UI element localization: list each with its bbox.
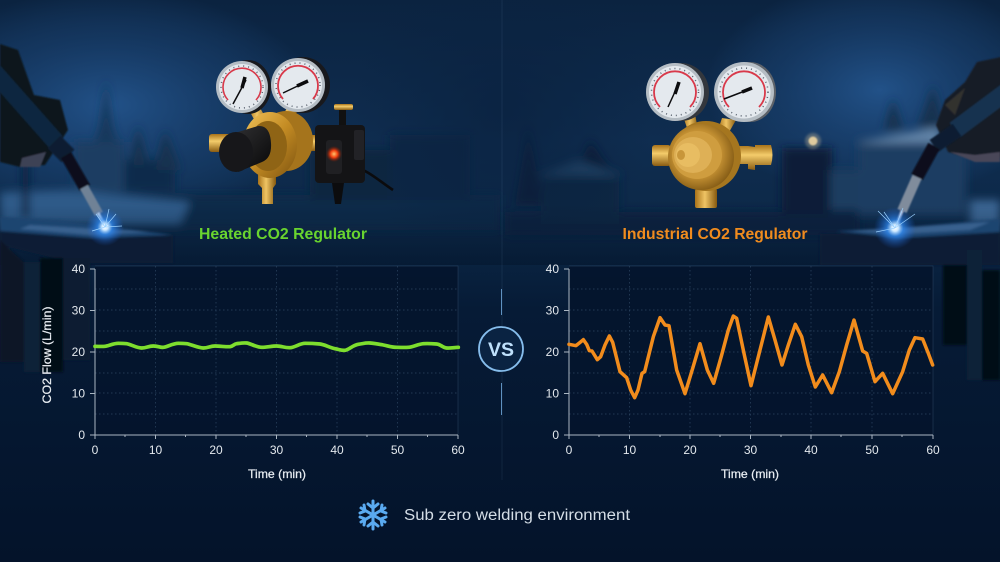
x axis title: Time (min) bbox=[248, 467, 306, 481]
green flow line bbox=[95, 343, 458, 350]
y tick labels: 10 bbox=[546, 386, 559, 400]
cable bbox=[352, 166, 393, 190]
y tick labels: 30 bbox=[72, 304, 85, 318]
center divider bbox=[500, 289, 502, 415]
brass body bbox=[243, 111, 313, 178]
y tick labels bbox=[546, 262, 559, 442]
background: left sky glow bbox=[0, 0, 320, 220]
x tick labels bbox=[566, 443, 940, 457]
bottom fitting bbox=[258, 172, 276, 204]
x tick labels: 10 bbox=[149, 443, 162, 457]
background: street lamp glow bbox=[805, 133, 821, 149]
left fitting bbox=[652, 145, 671, 166]
right gauge bbox=[271, 57, 330, 113]
steel table right bbox=[820, 219, 1000, 380]
y tick labels: 20 bbox=[72, 345, 85, 359]
background: right blurred town bbox=[505, 85, 1000, 235]
heater unit bbox=[315, 104, 365, 204]
heading: industrial regulator: Industrial CO2 Regulator bbox=[622, 226, 808, 243]
left gauge bbox=[646, 63, 709, 121]
orange flow line bbox=[569, 316, 933, 398]
y tick labels: 0 bbox=[78, 428, 85, 442]
x tick labels: 0 bbox=[92, 443, 99, 457]
x tick labels: 50 bbox=[391, 443, 404, 457]
x tick labels: 40 bbox=[330, 443, 344, 457]
vs badge: VS bbox=[488, 339, 514, 361]
plot background bbox=[569, 266, 933, 435]
icon: snowflake bbox=[360, 501, 386, 529]
grid bbox=[569, 266, 933, 435]
y tick labels bbox=[72, 262, 85, 442]
y tick labels: 20 bbox=[546, 345, 559, 359]
x tick labels: 50 bbox=[865, 443, 879, 457]
background: central darkening bbox=[353, 0, 653, 280]
gauge stems bbox=[248, 106, 297, 128]
caption text: Sub zero welding environment bbox=[404, 507, 631, 524]
y tick labels: 10 bbox=[72, 386, 85, 400]
heading: heated regulator: Heated CO2 Regulator bbox=[199, 226, 367, 243]
right welding scene bbox=[820, 55, 1000, 380]
weld spark right bbox=[874, 207, 975, 249]
x tick labels: 20 bbox=[683, 443, 697, 457]
plot background bbox=[95, 266, 458, 435]
x tick labels: 60 bbox=[926, 443, 940, 457]
axes bbox=[564, 269, 933, 439]
y tick labels: 0 bbox=[552, 428, 559, 442]
connector to heater bbox=[296, 135, 318, 151]
x tick labels: 30 bbox=[270, 443, 283, 457]
footer caption bbox=[360, 501, 631, 529]
x tick labels: 30 bbox=[744, 443, 757, 457]
background: right sky glow bbox=[705, 0, 1000, 200]
steel table left bbox=[0, 217, 173, 372]
x tick labels: 40 bbox=[804, 443, 818, 457]
gauge stems bbox=[683, 114, 736, 134]
heated regulator product bbox=[209, 57, 393, 204]
gloved hand right bbox=[936, 55, 1000, 162]
panel: industrial chart bbox=[546, 262, 940, 481]
x tick labels: 20 bbox=[209, 443, 223, 457]
panel: heated chart bbox=[40, 262, 465, 481]
y tick labels: 40 bbox=[546, 262, 559, 276]
gloved hand left bbox=[0, 44, 68, 167]
background: lower fade bbox=[0, 205, 1000, 265]
weld spark left bbox=[86, 208, 124, 246]
left gauge bbox=[216, 60, 271, 114]
background: faint centre seam bbox=[501, 0, 503, 480]
y axis title: CO2 Flow (L/min) bbox=[40, 306, 54, 404]
x tick labels: 10 bbox=[623, 443, 636, 457]
y tick labels: 30 bbox=[546, 304, 559, 318]
left welding scene bbox=[0, 44, 173, 372]
grid bbox=[95, 266, 458, 435]
x tick labels bbox=[92, 443, 465, 457]
left fitting bbox=[209, 134, 231, 152]
x tick labels: 60 bbox=[451, 443, 465, 457]
right fitting bbox=[736, 145, 772, 170]
welding torch left bbox=[0, 72, 104, 224]
black knob bbox=[219, 126, 271, 172]
x tick labels: 0 bbox=[566, 443, 573, 457]
background: left blurred town bbox=[0, 80, 500, 230]
welding torch right bbox=[897, 92, 1000, 224]
right gauge bbox=[714, 62, 776, 122]
industrial regulator product bbox=[646, 62, 776, 208]
axes bbox=[90, 269, 458, 439]
y tick labels: 40 bbox=[72, 262, 85, 276]
vs badge bbox=[479, 327, 523, 371]
bottom fitting bbox=[695, 189, 717, 208]
brass body with cone bbox=[668, 121, 741, 191]
x axis title: Time (min) bbox=[721, 467, 779, 481]
